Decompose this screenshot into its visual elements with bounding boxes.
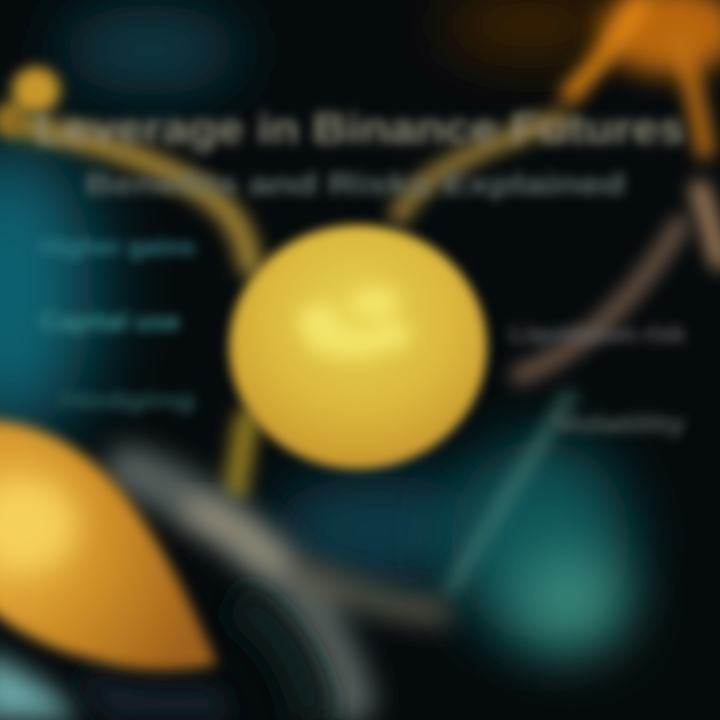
large gold coin bottom left (0, 420, 217, 671)
left text block: Capital use (40, 306, 180, 336)
pale glow bottom left (0, 650, 80, 720)
left text block: Higher gains (40, 234, 195, 261)
highlight on swoosh (195, 510, 275, 565)
right text block (510, 321, 686, 438)
right text block: Liquidation risk (510, 321, 686, 348)
orange streaks top right (570, 5, 720, 260)
left text block: Hedging (60, 387, 195, 414)
subtitle: Benefits and Risks Explained (85, 168, 625, 201)
dark base bottom (70, 670, 235, 720)
left text block (40, 234, 195, 414)
right text block: Volatility (555, 411, 686, 438)
golden arms (20, 120, 680, 590)
grey swoosh (130, 470, 440, 700)
dark curve under swoosh (235, 600, 312, 720)
central gold coin (229, 225, 487, 469)
title: Leverage in Binance Futures (35, 105, 685, 153)
icon: small gold ball (0, 67, 60, 137)
icon: coin emblem (298, 287, 410, 356)
